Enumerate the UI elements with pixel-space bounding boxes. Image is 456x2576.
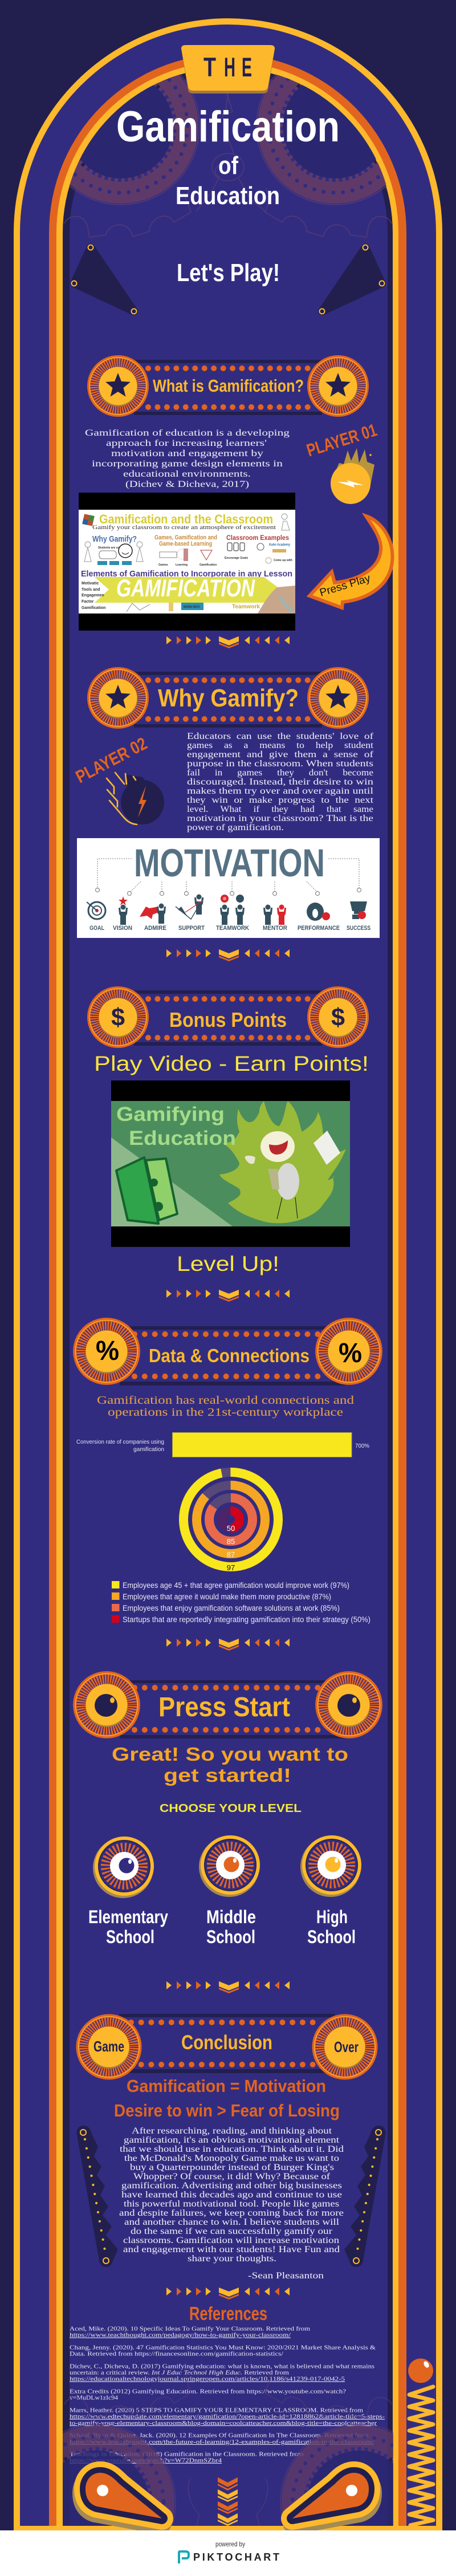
text: why gamify paragraph: engagement and give them a sense of [187, 750, 374, 759]
text: reference list: Marrs, Heather. (2020) 5 STEPS TO GAMIFY YOUR ELEMENTARY CLASSROOM. Retrieved from [70, 2407, 363, 2414]
banner: Bonus Points: $ [111, 1003, 125, 1031]
video thumbnail: gamification and the classroom: Games [158, 563, 168, 567]
right triangular bumper [319, 245, 384, 314]
title plate: THE: H [224, 52, 235, 82]
heading: level up: Level Up! [177, 1252, 279, 1275]
text: reference list: https://www.youtube.com/watch?v=W72DnmSZbr4 [70, 2457, 222, 2464]
image: motivation diagram: SUPPORT [178, 925, 205, 932]
level: middle school: Middle [206, 1907, 256, 1927]
text: data subtitle [97, 1394, 354, 1419]
banner: Data and Connections: % [96, 1336, 119, 1366]
radial chart: 50 [227, 1524, 235, 1533]
divider arrows 3 [166, 1290, 290, 1302]
text: conclusion paragraph [119, 2126, 344, 2264]
level: high school: School [307, 1927, 356, 1947]
text: definition of gamification: educational environments. [123, 469, 251, 479]
text: reference list: https://educationaltechnologyjournal.springeropen.com/articles/10.1186/s41239-017-0042-5 [70, 2376, 345, 2383]
banner: Bonus Points: $ [331, 1003, 345, 1031]
banner: Data and Connections: % [339, 1338, 362, 1368]
title plate: THE: E [242, 52, 252, 82]
text: get started [112, 1744, 348, 1786]
banner: Data and Connections [73, 1318, 382, 1385]
left triangular bumper [72, 245, 137, 314]
legend: Startups that are reportedly integrating gamification into their strategy (50%) [123, 1615, 370, 1624]
text: reference list: Teachings in Education. (2018) Gamification in the Classroom. Retrieved from [70, 2451, 304, 2458]
video thumbnail: gamification and the classroom: MORE INFO [184, 606, 199, 609]
text: why gamify paragraph [187, 732, 374, 832]
text: conclusion headings: Gamification = Motivation [127, 2076, 326, 2096]
text: why gamify paragraph: makes them try over and over again until [187, 786, 374, 796]
bar chart: conversion rate: 700% [355, 1443, 369, 1449]
radial chart [184, 1472, 278, 1572]
banner: Bonus Points: Bonus Points [169, 1008, 287, 1031]
text: data subtitle: operations in the 21st-century workplace [108, 1406, 343, 1419]
text: conclusion paragraph: and despite failures, we keep coming back for more [119, 2208, 344, 2218]
text: why gamify paragraph: Educators can use the students' love of [187, 732, 374, 741]
footer: powered by piktochart [179, 2540, 279, 2563]
video thumbnail: gamification and the classroom: Gamification and the Classroom [99, 512, 273, 526]
text: definition of gamification: Gamification of education is a developing [85, 428, 290, 438]
level: elementary school: School [106, 1927, 154, 1947]
video thumbnail: gamification and the classroom: Factor [82, 600, 94, 604]
video thumbnail: gamification and the classroom: Gamification [82, 606, 105, 610]
video thumbnail: gamification and the classroom: Encourage Goals [225, 556, 248, 560]
text: conclusion paragraph: After researching, reading, and thinking about [132, 2126, 332, 2136]
footer white band [0, 2530, 456, 2576]
level: middle school [199, 1835, 260, 1947]
text: definition of gamification [85, 428, 290, 489]
text: author signature: -Sean Pleasanton [248, 2271, 324, 2281]
image: motivation diagram: SUCCESS [347, 925, 370, 932]
text: reference list: Aced, Mike. (2020). 10 Specific Ideas To Gamify Your Classroom. Retrieved from [70, 2325, 311, 2332]
text: reference list: https://www.edtechupdate.com/elementary/gamification/?open-article-id=12818862&article-title=5-steps- [70, 2413, 385, 2420]
text: conclusion paragraph: that we should use in education. Think about it. Did [120, 2144, 344, 2154]
text: get started: Great! So you want to [112, 1744, 348, 1765]
banner: Data and Connections: Data & Connections [149, 1345, 310, 1366]
image: motivation diagram: MENTOR [263, 925, 287, 932]
banner: What is Gamification: What is Gamification? [153, 376, 304, 396]
text: conclusion paragraph: do the same if we can successfully gamify our [131, 2226, 333, 2236]
title: of [218, 152, 238, 180]
banner: Why Gamify: Why Gamify? [158, 684, 299, 712]
right side rail [344, 2126, 386, 2267]
text: data subtitle: Gamification has real-world connections and [97, 1394, 354, 1407]
text: reference list: https://www.teachthought.com/pedagogy/how-to-gamify-your-classroom/ [70, 2332, 291, 2339]
text: why gamify paragraph: fail in games they don't become [187, 768, 373, 778]
text: why gamify paragraph: purpose in the classroom. When students [187, 759, 373, 769]
plunger ball and spring [408, 2358, 433, 2525]
text: reference list: https://www.teachthought.com/the-future-of-learning/12-examples-of-gamification-in-the-classroom/ [70, 2439, 374, 2445]
left flipper [84, 2473, 162, 2523]
image: motivation diagram: TEAMWORK [216, 925, 249, 932]
legend [112, 1581, 370, 1624]
center chevrons [218, 2477, 238, 2526]
radial chart: 97 [227, 1563, 235, 1572]
video thumbnail: gamification and the classroom: Students are used [98, 546, 123, 550]
video thumbnail: gamification and the classroom [79, 493, 295, 631]
video thumbnail: gamification and the classroom: Motivatic [82, 582, 99, 586]
level: high school: High [316, 1907, 348, 1927]
text: reference list: uncertain: a critical review. Int J Educ Technol High Educ. Retrieved from [70, 2370, 290, 2376]
text: why gamify paragraph: games as a means to help student [187, 741, 374, 750]
text: reference list: Chang, Jenny. (2020). 47 Gamification Statistics You Must Know: 2020/2021 Market Share Analysis & [70, 2345, 376, 2351]
divider arrows 2 [166, 949, 290, 961]
text: conclusion paragraph: have learned this decades ago and continue to use [121, 2190, 342, 2200]
text: reference list: Extra Credits (2012) Gamifying Education. Retrieved from https://www.youtube.com/watch? [70, 2388, 346, 2395]
text: reference list [70, 2325, 385, 2464]
title plate: THE [181, 45, 275, 94]
radial chart: 87 [227, 1550, 235, 1559]
divider arrows 6 [166, 2287, 290, 2299]
title: Education [176, 182, 280, 210]
bottom decorative gears [63, 2369, 393, 2526]
icon: yellow pinball [331, 448, 374, 504]
video thumbnail: gamification and the classroom: Classroom Examples [226, 535, 289, 542]
banner: Conclusion: Over [334, 2038, 359, 2055]
text: why gamify paragraph: power of gamification. [187, 823, 284, 832]
video thumbnail: gamification and the classroom: Gamification [199, 563, 217, 567]
video thumbnail: gamification and the classroom: Why Gamify? [92, 534, 137, 544]
text: conclusion paragraph: gamification, it's an obvious motivational element [124, 2135, 340, 2145]
divider arrows 5 [166, 1981, 290, 1993]
image: motivation diagram: PERFORMANCE [298, 925, 340, 932]
level: high school [300, 1835, 361, 1947]
text: reference list: v=MuDLw1zIc94 [70, 2395, 119, 2402]
video thumbnail: gamifying education: Gamifying [116, 1103, 225, 1126]
text: conclusion paragraph: Whopper? Of course, it did! Why? Because of [133, 2172, 331, 2181]
text: definition of gamification: motivation and engagement by [111, 449, 263, 458]
text: conclusion paragraph: classrooms. Gamification will increase motivation [123, 2236, 339, 2245]
divider arrows 1 [166, 636, 290, 648]
level: elementary school: Elementary [88, 1907, 168, 1927]
text: conclusion headings: Desire to win > Fear of Losing [114, 2100, 340, 2120]
heading: play video: Play Video - Earn Points! [94, 1052, 369, 1075]
banner: Conclusion: Conclusion [181, 2031, 272, 2054]
text: get started: get started! [164, 1765, 291, 1786]
image: motivation diagram: VISION [113, 925, 132, 932]
title plate: THE: T [203, 52, 216, 82]
text: conclusion paragraph: and another chance to win. I believe students will [124, 2217, 340, 2227]
label: player 01: PLAYER 01 [304, 420, 379, 461]
video thumbnail: gamification and the classroom: Gamify your classroom to create an atmosphere of excitement [92, 525, 276, 531]
banner: Press Start: Press Start [158, 1692, 290, 1722]
video thumbnail: gamification and the classroom: Tools and [82, 588, 100, 592]
bar chart: conversion rate [76, 1432, 369, 1457]
text: reference list: to-gamify-your-elementary-classroom&blog-domain=coolcatteacher.com&blog-title=the-coolcatteacher [70, 2420, 377, 2427]
video thumbnail: gamification and the classroom: Learning [176, 563, 188, 567]
image: motivation diagram [77, 838, 380, 938]
text: definition of gamification: incorporating game design elements in [92, 459, 283, 469]
radial chart: 85 [227, 1537, 235, 1546]
video thumbnail: gamification and the classroom: Games, Gamification and [154, 534, 217, 541]
banner: Conclusion [76, 2014, 378, 2080]
text: definition of gamification: (Dichev & Dicheva, 2017) [125, 480, 249, 489]
banner: Bonus Points [87, 986, 369, 1048]
video thumbnail: gamification and the classroom: GAMIFICATION [116, 575, 255, 602]
text: definition of gamification: approach for increasing learners' [106, 438, 267, 448]
text: conclusion paragraph: gamification. Advertising and other big businesses [121, 2181, 342, 2191]
legend: Employees that agree it would make them more productive (87%) [123, 1592, 331, 1601]
text: conclusion paragraph: buy a Quarterpounder instead of Burger King's [130, 2163, 334, 2172]
banner: Press Start [73, 1671, 382, 1738]
arrow: press play: Press Play [318, 572, 372, 599]
bar chart: conversion rate: Conversion rate of companies using [76, 1439, 164, 1445]
left side rail [76, 2126, 118, 2267]
icon: dark pinball [107, 773, 164, 824]
video thumbnail: gamification and the classroom: Come up with [274, 559, 292, 562]
video thumbnail: gamifying education [111, 1080, 350, 1247]
arrow: press play [310, 516, 393, 608]
text: why gamify paragraph: motivation in your classroom? That is the [187, 814, 373, 823]
text: conclusion paragraph: the McDonald's Monopoly Game make us want to [124, 2154, 339, 2163]
subtitle: Let's Play: Let's Play! [177, 259, 280, 287]
text: conclusion paragraph: this powerful motivational tool. People like games [124, 2199, 339, 2209]
image: motivation diagram: GOAL [89, 925, 104, 932]
heading: references: References [189, 2303, 267, 2324]
video thumbnail: gamification and the classroom: Game-based Learning [159, 541, 212, 547]
text: why gamify paragraph: level. What if they had that same [187, 805, 373, 814]
image: motivation diagram: MOTIVATION [134, 841, 325, 885]
video thumbnail: gamification and the classroom: Kahn Academy [269, 543, 291, 547]
text: conclusion paragraph: and engagement with our students! Have Fun and [123, 2245, 340, 2254]
banner: Conclusion: Game [93, 2038, 124, 2055]
bottom yellow rail [14, 2526, 442, 2530]
level: elementary school [88, 1836, 168, 1947]
text: reference list: Schaaf, Ryan & Quinn, Jack. (2020). 12 Examples Of Gamification In The Classroom. Retrieved from [70, 2432, 369, 2439]
bar chart: conversion rate: gamification [133, 1446, 164, 1453]
legend: Employees that enjoy gamification software solutions at work (85%) [123, 1604, 340, 1612]
level: middle school: School [206, 1927, 255, 1947]
legend: Employees age 45 + that agree gamification would improve work (97%) [123, 1581, 349, 1590]
top decorative gears [64, 74, 392, 238]
footer: powered by piktochart: PIKTOCHART [193, 2551, 279, 2563]
text: reference list: Dichev, C., Dicheva, D. (2017) Gamifying education: what is known, what is believed and what remains [70, 2363, 374, 2370]
label: player 02: PLAYER 02 [72, 733, 150, 787]
text: conclusion paragraph: share your thoughts. [188, 2254, 276, 2264]
video thumbnail: gamification and the classroom: Engagemen [82, 594, 104, 598]
text: reference list: Data. Retrieved from https://financesonline.com/gamification-statistics/ [70, 2351, 284, 2358]
text: choose your level: CHOOSE YOUR LEVEL [160, 1802, 302, 1815]
text: why gamify paragraph: discouraged. Instead, their desire to win [187, 777, 373, 787]
video thumbnail: gamifying education: Education [129, 1127, 236, 1149]
title [116, 103, 340, 210]
banner: What is Gamification [87, 355, 369, 417]
title: Gamification [116, 103, 340, 151]
video thumbnail: gamification and the classroom: Teamwork [232, 604, 260, 610]
right flipper [292, 2473, 370, 2523]
footer: powered by piktochart: powered by [215, 2540, 245, 2548]
divider arrows 4 [166, 1639, 290, 1651]
text: why gamify paragraph: they win or make progress to the next [187, 795, 374, 805]
banner: Why Gamify [87, 667, 369, 729]
image: motivation diagram: ADMIRE [144, 925, 166, 932]
video thumbnail: gamification and the classroom: Elements of Gamification to Incorporate in any Lesson [81, 569, 292, 579]
text: conclusion headings [114, 2076, 340, 2120]
